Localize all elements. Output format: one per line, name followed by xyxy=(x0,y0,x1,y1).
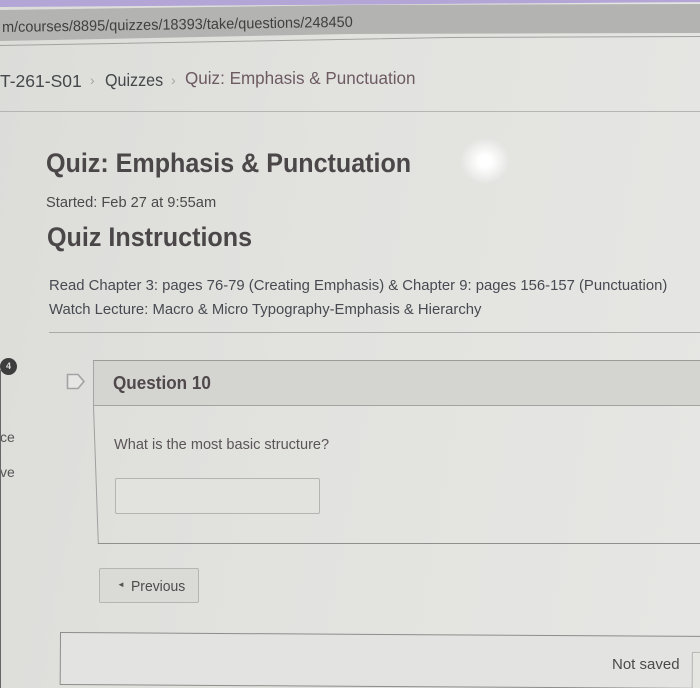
previous button xyxy=(99,568,199,603)
browser address bar xyxy=(0,4,700,46)
previous arrow: ◄ xyxy=(117,580,125,589)
question text: What is the most basic structure? xyxy=(114,436,329,453)
quiz title: Quiz: Emphasis & Punctuation xyxy=(46,148,411,178)
sidebar fragment ce: ce xyxy=(0,429,15,445)
lecture line: Watch Lecture: Macro & Micro Typography-Emphasis & Hierarchy xyxy=(49,301,481,318)
glare spot xyxy=(460,138,510,184)
breadcrumb course: T-261-S01 xyxy=(0,71,82,91)
started date: Started: Feb 27 at 9:55am xyxy=(46,195,216,211)
breadcrumb quizzes: Quizzes xyxy=(105,70,163,90)
left screen edge xyxy=(0,370,1,688)
sidebar badge xyxy=(0,358,17,375)
question number: Question 10 xyxy=(113,373,211,393)
address bar URL: m/courses/8895/quizzes/18393/take/questions/248450 xyxy=(2,14,353,36)
question body xyxy=(93,406,700,544)
question header xyxy=(93,360,700,406)
breadcrumb separator: › xyxy=(90,72,95,88)
icon: question flag xyxy=(66,374,85,390)
breadcrumb navigation xyxy=(0,68,415,91)
previous label: Previous xyxy=(131,578,185,595)
breadcrumb separator: › xyxy=(171,72,176,88)
panel: question 10 xyxy=(93,360,700,544)
panel: footer save bar xyxy=(60,632,700,688)
reading line: Read Chapter 3: pages 76-79 (Creating Emphasis) & Chapter 9: pages 156-157 (Punctuation) xyxy=(49,277,667,294)
browser tab strip xyxy=(0,0,700,7)
quiz instructions heading: Quiz Instructions xyxy=(47,222,252,252)
breadcrumb current quiz: Quiz: Emphasis & Punctuation xyxy=(185,68,415,88)
instructions text xyxy=(49,277,667,318)
answer input xyxy=(115,478,320,514)
sidebar badge: 4 xyxy=(6,361,11,371)
footer submit button edge xyxy=(692,652,700,688)
sidebar fragment ve: ve xyxy=(0,464,15,480)
not saved status: Not saved xyxy=(612,656,680,673)
